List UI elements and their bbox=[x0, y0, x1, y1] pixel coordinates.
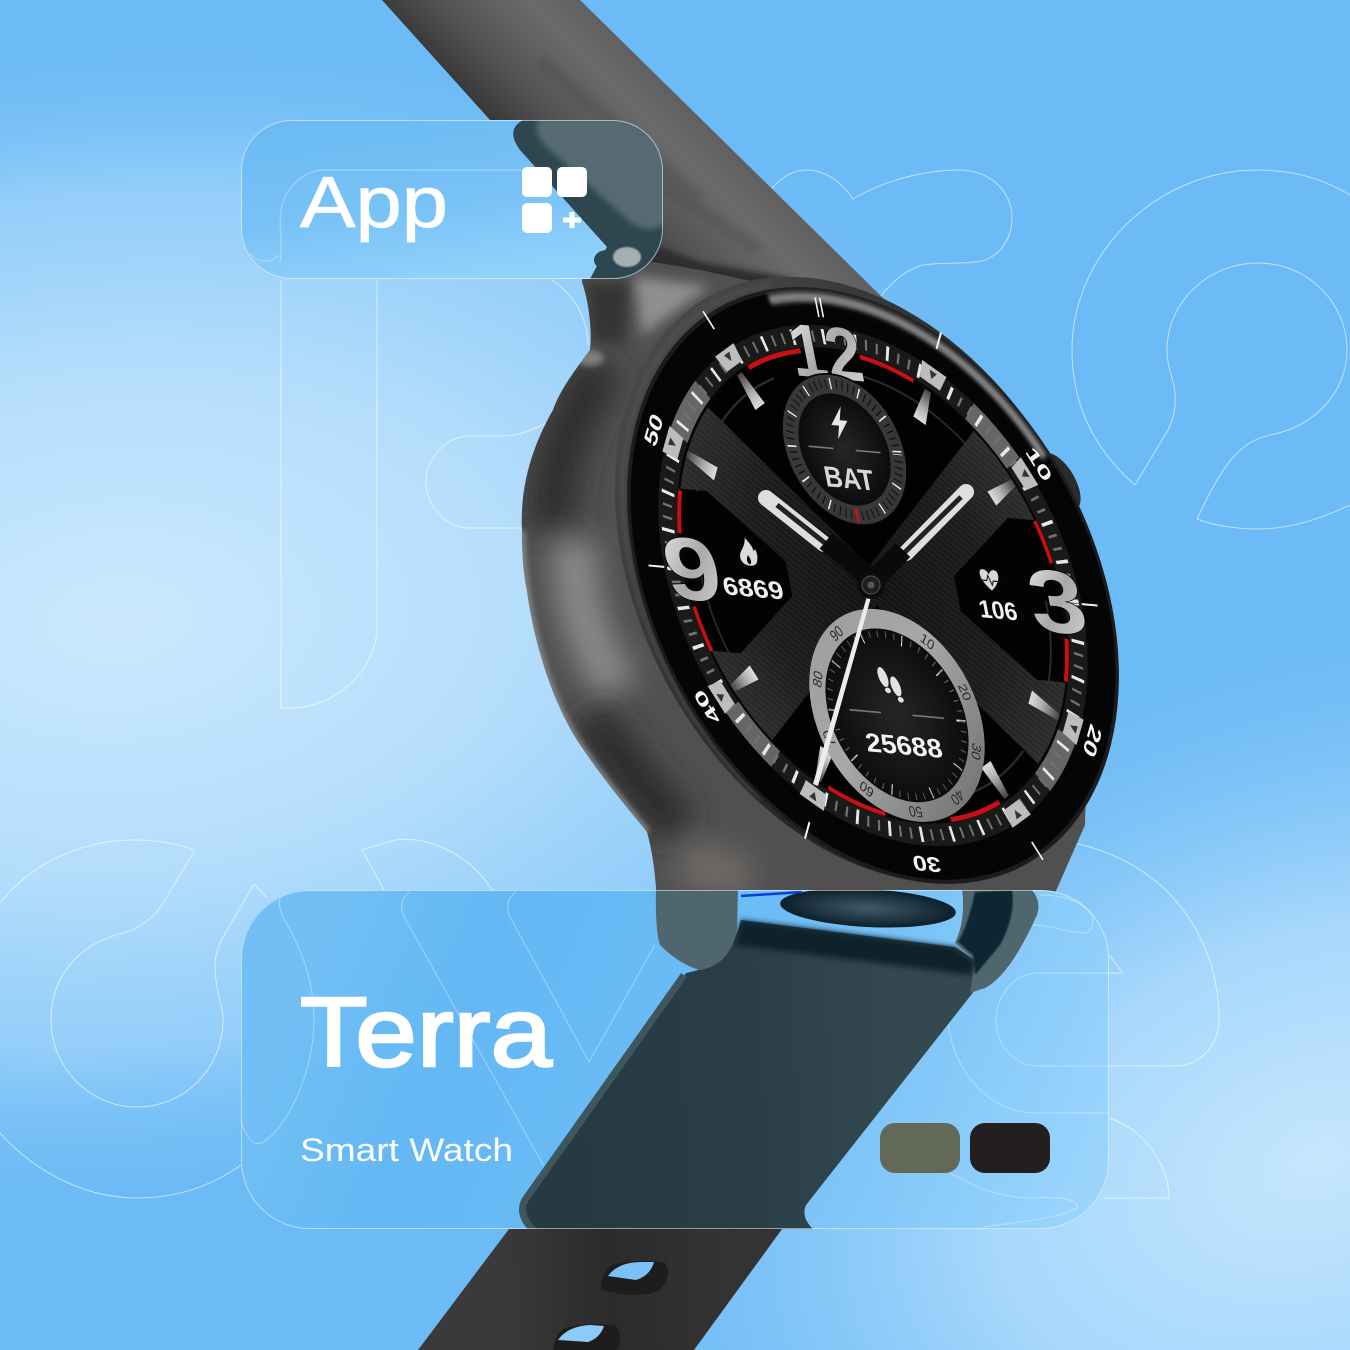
bezel numbers: 20 bbox=[1078, 720, 1105, 762]
ring numbers: 70 bbox=[819, 728, 839, 749]
dial group in face perspective bbox=[615, 276, 1119, 884]
hour markers bbox=[640, 335, 1106, 836]
ring numbers: 40 bbox=[948, 786, 968, 810]
ring numbers bbox=[797, 618, 1000, 828]
icon: app grid with plus bbox=[522, 167, 587, 233]
numerals: 3 bbox=[1020, 551, 1095, 655]
hour hand bbox=[766, 498, 870, 578]
steps value: 25688 bbox=[863, 728, 945, 765]
subheading: Smart Watch: Smart Watch bbox=[300, 1132, 513, 1168]
bezel numbers: 30 bbox=[910, 850, 943, 876]
ring numbers: 50 bbox=[907, 803, 924, 821]
icon: bolt bbox=[828, 405, 851, 440]
bezel numbers bbox=[635, 408, 1137, 894]
battery subdial bbox=[769, 369, 920, 530]
ghost outline lettering bbox=[0, 170, 1350, 1198]
bezel ticks bbox=[593, 278, 1148, 869]
lower strap bbox=[418, 1225, 785, 1350]
calories block bbox=[713, 535, 786, 605]
ring numbers: 60 bbox=[857, 777, 876, 802]
crown bbox=[1031, 447, 1089, 517]
numerals bbox=[611, 291, 1095, 655]
blurred strap seen through the glass bbox=[250, 118, 668, 279]
oval case back bbox=[780, 890, 956, 928]
watch bbox=[382, 0, 1170, 1350]
lens outlines bbox=[241, 892, 1123, 1227]
ring numbers: 30 bbox=[969, 741, 984, 763]
upper strap bbox=[382, 0, 885, 300]
card: Terra bbox=[241, 884, 1123, 1232]
calories value: 6869 bbox=[720, 571, 786, 605]
ring numbers: 80 bbox=[810, 668, 825, 690]
ring numbers: 10 bbox=[918, 629, 937, 654]
numerals: 9 bbox=[655, 518, 730, 622]
bezel numbers: 40 bbox=[690, 685, 725, 728]
colour swatch: black bbox=[970, 1123, 1050, 1173]
icon: flame bbox=[736, 537, 759, 567]
red arcs bbox=[639, 334, 1107, 837]
minute track bbox=[625, 319, 1121, 852]
card: App bbox=[241, 118, 668, 279]
heart rate block bbox=[971, 568, 1020, 626]
bezel numbers: 10 bbox=[1021, 443, 1056, 486]
watch case bbox=[522, 262, 1086, 892]
dial face bbox=[639, 334, 1107, 837]
ring numbers: 20 bbox=[955, 682, 975, 703]
icon: footprints bbox=[875, 665, 905, 703]
strap holes bbox=[553, 1261, 668, 1350]
ring numbers: 90 bbox=[826, 621, 846, 645]
minute hand bbox=[872, 492, 966, 582]
numerals: 12 bbox=[782, 307, 870, 398]
heart rate value: 106 bbox=[976, 594, 1020, 626]
heading: Terra: Terra bbox=[300, 977, 553, 1087]
metal rim bbox=[563, 256, 1165, 903]
colour swatch: olive bbox=[880, 1123, 960, 1173]
steps subdial bbox=[791, 602, 1003, 829]
BAT label: BAT bbox=[821, 460, 877, 497]
X band bbox=[680, 350, 1066, 821]
bezel numbers: 50 bbox=[641, 409, 668, 451]
right lug bbox=[955, 888, 1038, 993]
heading: App: App bbox=[300, 163, 448, 243]
hand hub bbox=[857, 571, 885, 599]
icon: heart bbox=[977, 569, 1003, 592]
second hand bbox=[813, 598, 870, 786]
left lug bbox=[656, 888, 738, 970]
glass-tinted lower strap bbox=[521, 920, 975, 1232]
